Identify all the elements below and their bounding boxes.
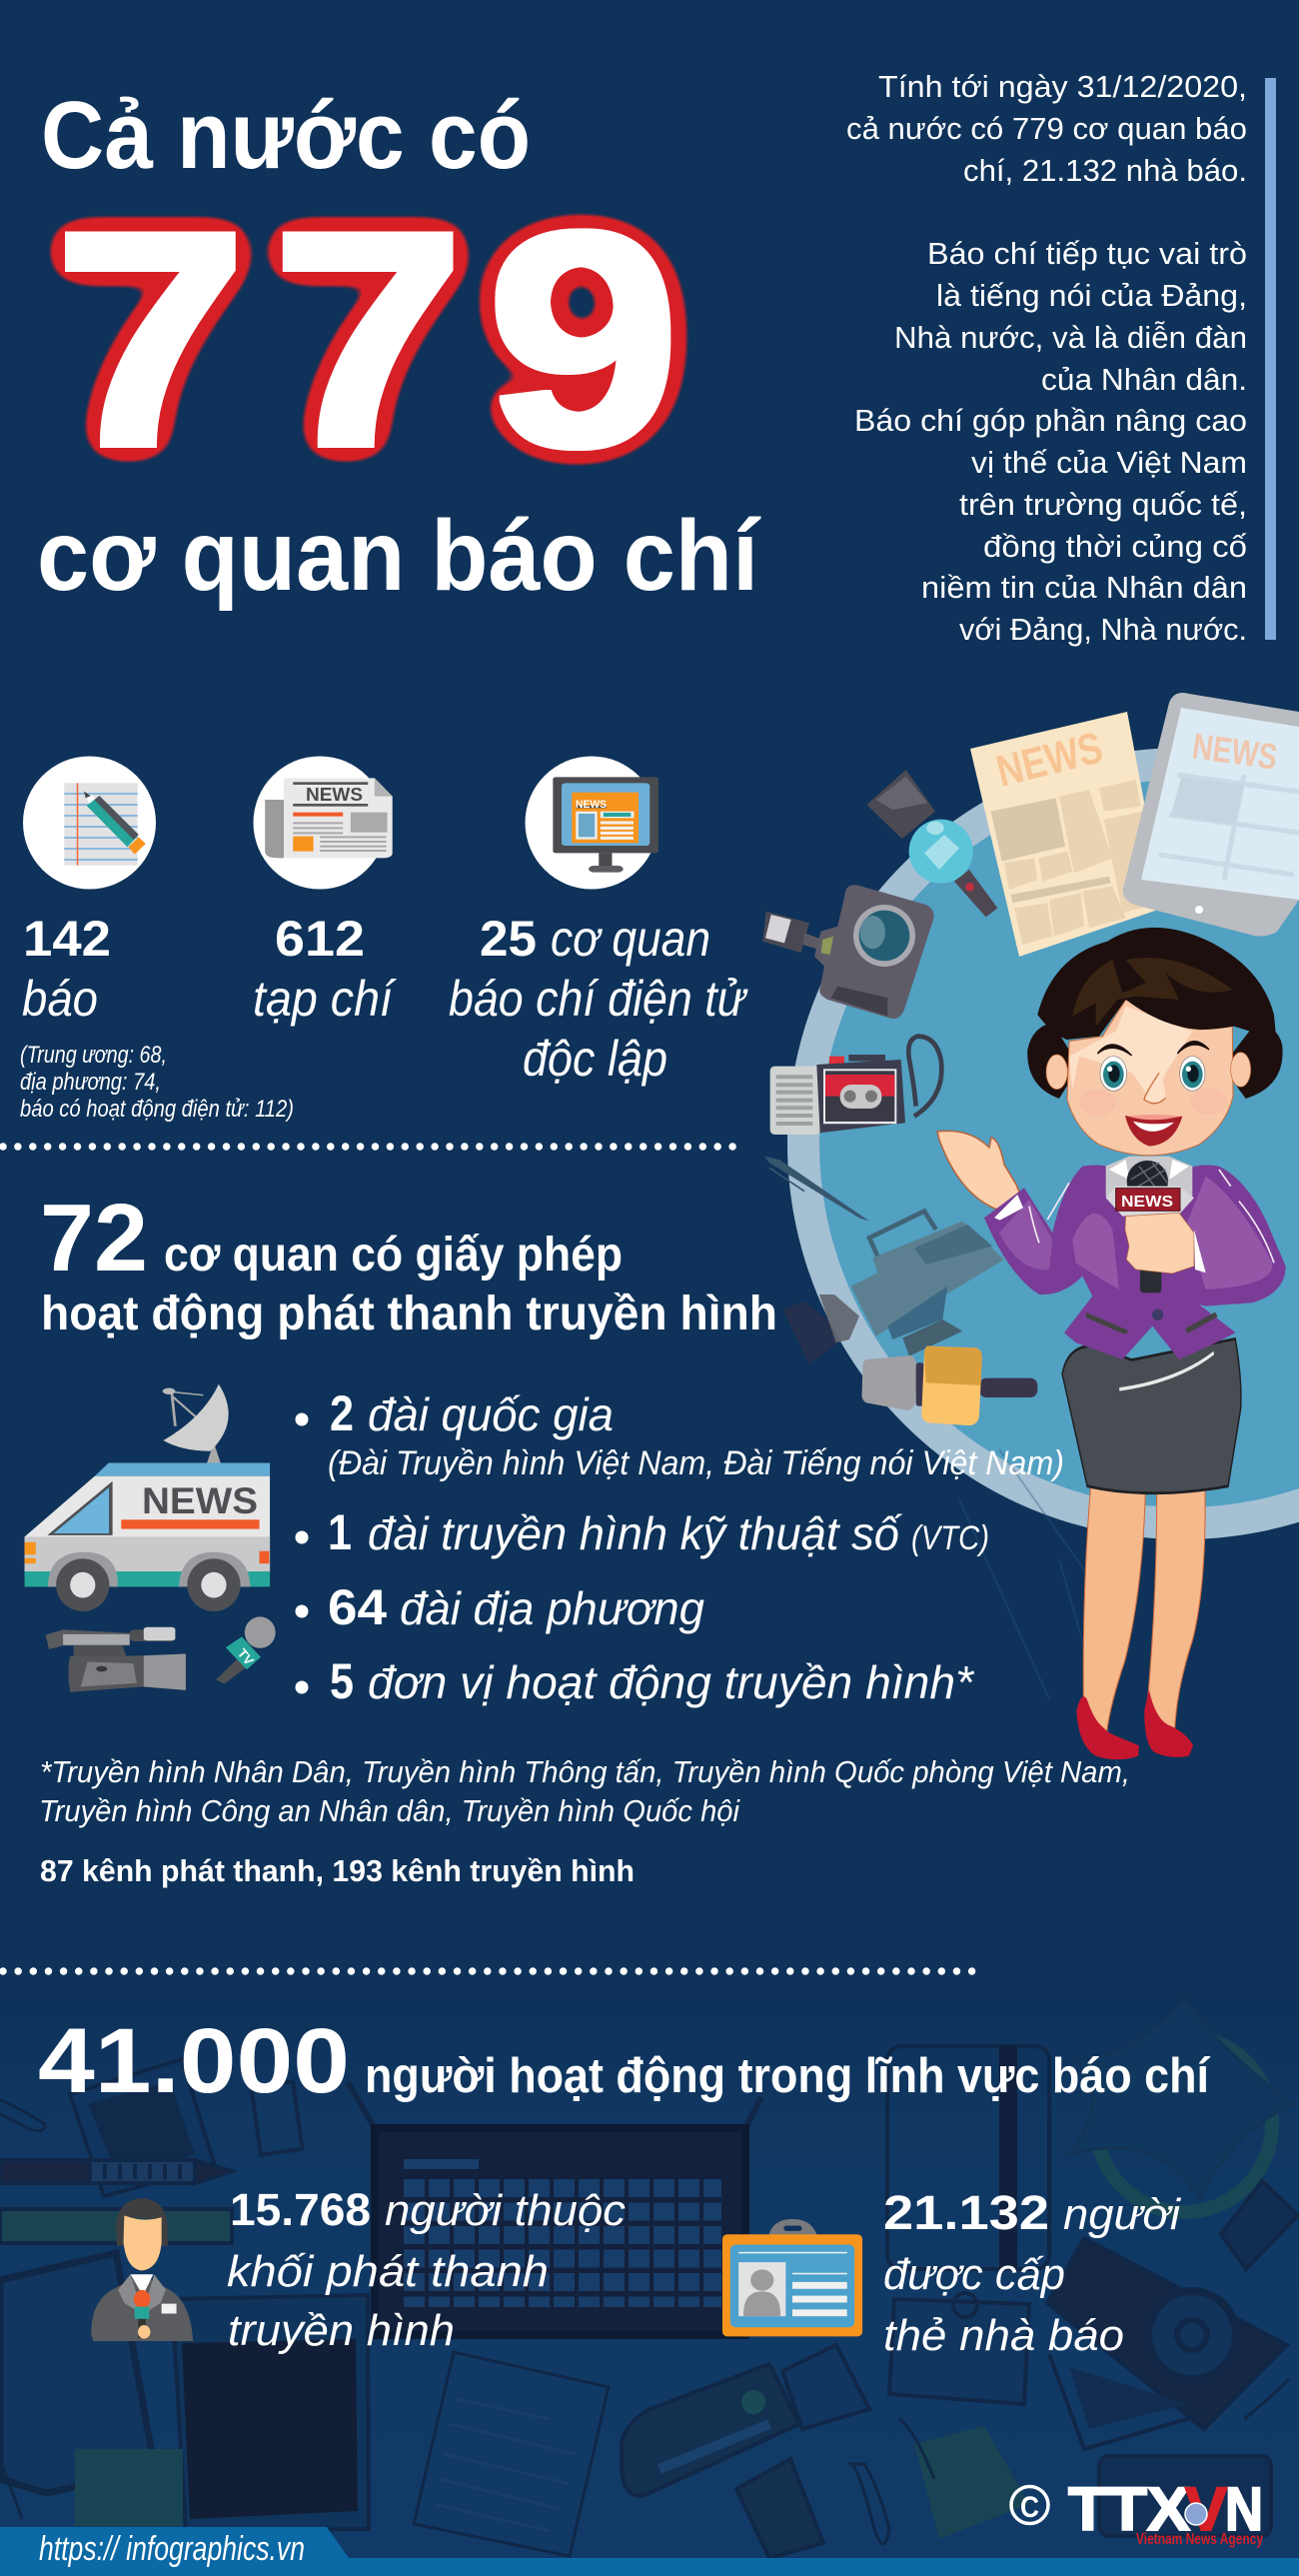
panel: bottom background with faded desk objects	[0, 1984, 1299, 2576]
icon: photo camera with flash	[762, 885, 934, 1019]
icon: round microphone	[909, 820, 997, 917]
icon: news van with dish	[25, 1384, 270, 1611]
list item: 2 đài quốc gia: đài quốc gia	[368, 1388, 614, 1440]
list item: 1 đài truyền hình kỹ thuật số: đài truyền hình kỹ thuật số	[368, 1507, 902, 1559]
logo: TTXVN	[1068, 2475, 1263, 2548]
intro paragraph, right aligned: cả nước có 779 cơ quan báo	[846, 111, 1247, 146]
stat: 142 báo	[20, 911, 294, 1123]
icon: male TV reporter	[91, 2198, 193, 2341]
icon: newspaper	[254, 756, 393, 890]
intro paragraph, right aligned: đồng thời củng cố	[983, 529, 1247, 564]
stat: 142 báo: địa phương: 74,	[20, 1069, 161, 1096]
intro paragraph, right aligned	[846, 69, 1247, 647]
stat: 612 tạp chí	[253, 911, 397, 1027]
stat: 142 báo: (Trung ương: 68,	[20, 1042, 167, 1069]
channels count: 87 kênh phát thanh, 193 kênh truyền hình	[40, 1853, 635, 1888]
icon: pen	[764, 1157, 869, 1222]
intro paragraph, right aligned: là tiếng nói của Đảng,	[936, 278, 1247, 313]
footnote on television units: Truyền hình Công an Nhân dân, Truyền hình Quốc hội	[39, 1793, 740, 1828]
stat: 21.132 người được cấp thẻ nhà báo: thẻ nhà báo	[883, 2311, 1124, 2360]
stat: 21.132 người được cấp thẻ nhà báo: người	[1063, 2190, 1181, 2239]
stat: 612 tạp chí: 612	[275, 911, 365, 967]
icon: newspaper: NEWS	[306, 785, 363, 805]
heading: 72 cơ quan có giấy phép: cơ quan có giấy phép	[164, 1229, 623, 1282]
intro paragraph, right aligned: vị thế của Việt Nam	[971, 445, 1247, 480]
intro paragraph, right aligned: Nhà nước, và là diễn đàn	[894, 320, 1247, 355]
stat: 25 cơ quan báo chí điện tử độc lập: 25	[480, 911, 537, 967]
intro paragraph, right aligned: với Đảng, Nhà nước.	[959, 612, 1247, 647]
logo: TTXVN: V	[1185, 2475, 1227, 2543]
heading: 41.000 người: người hoạt động trong lĩnh vực báo chí	[365, 2049, 1210, 2103]
icon: press ID card	[722, 2219, 862, 2336]
big number 779: 779	[54, 168, 680, 510]
reporter raised hand	[937, 1131, 1021, 1210]
list: broadcasting stations	[296, 1385, 1064, 1709]
reporter illustration	[937, 928, 1286, 1759]
footer band with URL tab	[0, 2527, 1299, 2576]
intro paragraph, right aligned: niềm tin của Nhân dân	[921, 570, 1247, 605]
logo: TTXVN: N	[1225, 2475, 1263, 2543]
icon: TV camera and microphone: TV	[235, 1645, 257, 1668]
intro paragraph, right aligned: trên trường quốc tế,	[959, 487, 1247, 522]
icon: monitor with news page: NEWS	[576, 799, 607, 811]
vertical blue bar	[1265, 78, 1276, 640]
icon: monitor with news page	[526, 756, 658, 890]
footer band with URL tab: https:// infographics.vn	[39, 2530, 305, 2568]
stat: 21.132 người được cấp thẻ nhà báo	[883, 2187, 1181, 2360]
stat: 15.768 người thuộc khối phát thanh truyền hình: người thuộc	[385, 2186, 626, 2235]
icon: flash unit	[866, 770, 935, 839]
icon: tablet showing news	[1123, 693, 1299, 936]
stat: 25 cơ quan báo chí điện tử độc lập	[449, 911, 748, 1087]
icon: video camera	[782, 1212, 1004, 1364]
intro paragraph, right aligned: Tính tới ngày 31/12/2020,	[878, 69, 1247, 104]
list item: 1 đài truyền hình kỹ thuật số: (VTC)	[911, 1519, 989, 1557]
floating media objects around the circle: top	[762, 770, 997, 1135]
dotted divider 2	[3, 1967, 976, 1975]
stat: 15.768 người thuộc khối phát thanh truyền hình	[227, 2184, 626, 2355]
decorative ring and blue circle behind reporter	[787, 748, 1299, 1769]
list item: 2 đài quốc gia: 2	[330, 1385, 354, 1441]
lower props: pen, video camera, microphone	[764, 1157, 1037, 1425]
intro paragraph, right aligned: Báo chí góp phần nâng cao	[854, 403, 1247, 438]
icon: microphone with yellow cube	[861, 1346, 1037, 1425]
list item: 64 đài địa phương	[296, 1579, 704, 1635]
heading: 72 cơ quan có giấy phép: hoạt động phát thanh truyền hình	[41, 1288, 777, 1340]
icon: news van with dish: NEWS	[142, 1480, 258, 1521]
stat: 25 cơ quan báo chí điện tử độc lập: báo chí điện tử	[449, 971, 748, 1027]
footnote on television units	[39, 1754, 1130, 1828]
list item: 2 đài quốc gia: (Đài Truyền hình Việt Nam, Đài Tiếng nói Việt Nam)	[328, 1444, 1064, 1482]
icon: cassette recorder	[770, 1037, 941, 1135]
intro paragraph, right aligned: Báo chí tiếp tục vai trò	[927, 236, 1247, 271]
intro paragraph, right aligned: chí, 21.132 nhà báo.	[963, 153, 1247, 188]
logo: TTXVN: TTX	[1068, 2475, 1190, 2543]
stat: 25 cơ quan báo chí điện tử độc lập: cơ quan	[551, 911, 710, 967]
stat: 15.768 người thuộc khối phát thanh truyền hình: truyền hình	[228, 2306, 455, 2355]
intro paragraph, right aligned: của Nhân dân.	[1041, 362, 1247, 397]
icon: notebook and pencil	[23, 756, 156, 890]
stat: 142 báo: báo	[22, 971, 98, 1027]
stat: 25 cơ quan báo chí điện tử độc lập: độc lập	[523, 1031, 667, 1087]
icon: newspaper sheet: NEWS	[992, 723, 1107, 797]
dotted divider 1	[3, 1143, 735, 1151]
footnote on television units: *Truyền hình Nhân Dân, Truyền hình Thông tấn, Truyền hình Quốc phòng Việt Nam,	[40, 1754, 1130, 1789]
heading: 72 cơ quan có giấy phép: 72	[40, 1185, 148, 1291]
reporter legs, skirt and shoes	[1062, 1338, 1241, 1759]
heading: 41.000 người	[38, 2010, 1210, 2112]
stat: 21.132 người được cấp thẻ nhà báo: 21.132	[883, 2187, 1049, 2240]
stat: 21.132 người được cấp thẻ nhà báo: được cấp	[883, 2250, 1065, 2299]
list item: 5 đơn vị hoạt động truyền hình: 5	[330, 1653, 354, 1709]
list item: 5 đơn vị hoạt động truyền hình: đơn vị hoạt động truyền hình*	[368, 1656, 975, 1708]
title: Cả nước có: Cả nước có	[41, 82, 531, 189]
heading: 72 cơ quan có giấy phép	[40, 1185, 777, 1340]
list item: 64 đài địa phương: đài địa phương	[400, 1582, 704, 1634]
list item: 2 đài quốc gia	[296, 1385, 1064, 1482]
copyright mark: C	[1020, 2491, 1039, 2524]
stat: 142 báo: 142	[23, 911, 111, 967]
stat: 142 báo: báo có hoạt động điện tử: 112)	[20, 1096, 294, 1123]
reporter upper body and head	[984, 928, 1286, 1359]
list item: 1 đài truyền hình kỹ thuật số: 1	[328, 1504, 352, 1560]
stat: 15.768 người thuộc khối phát thanh truyền hình: 15.768	[230, 2184, 371, 2235]
stat: 15.768 người thuộc khối phát thanh truyền hình: khối phát thanh	[227, 2247, 549, 2296]
stat: 612 tạp chí: tạp chí	[253, 971, 397, 1027]
icon: TV camera and microphone	[46, 1616, 276, 1692]
title: cơ quan báo chí: cơ quan báo chí	[37, 500, 761, 612]
copyright mark	[1011, 2487, 1048, 2524]
list item: 64 đài địa phương: 64	[328, 1579, 387, 1635]
reporter mic NEWS label: NEWS	[1121, 1194, 1173, 1211]
heading: 41.000 người: 41.000	[38, 2010, 350, 2112]
icon: newspaper sheet	[970, 712, 1164, 957]
